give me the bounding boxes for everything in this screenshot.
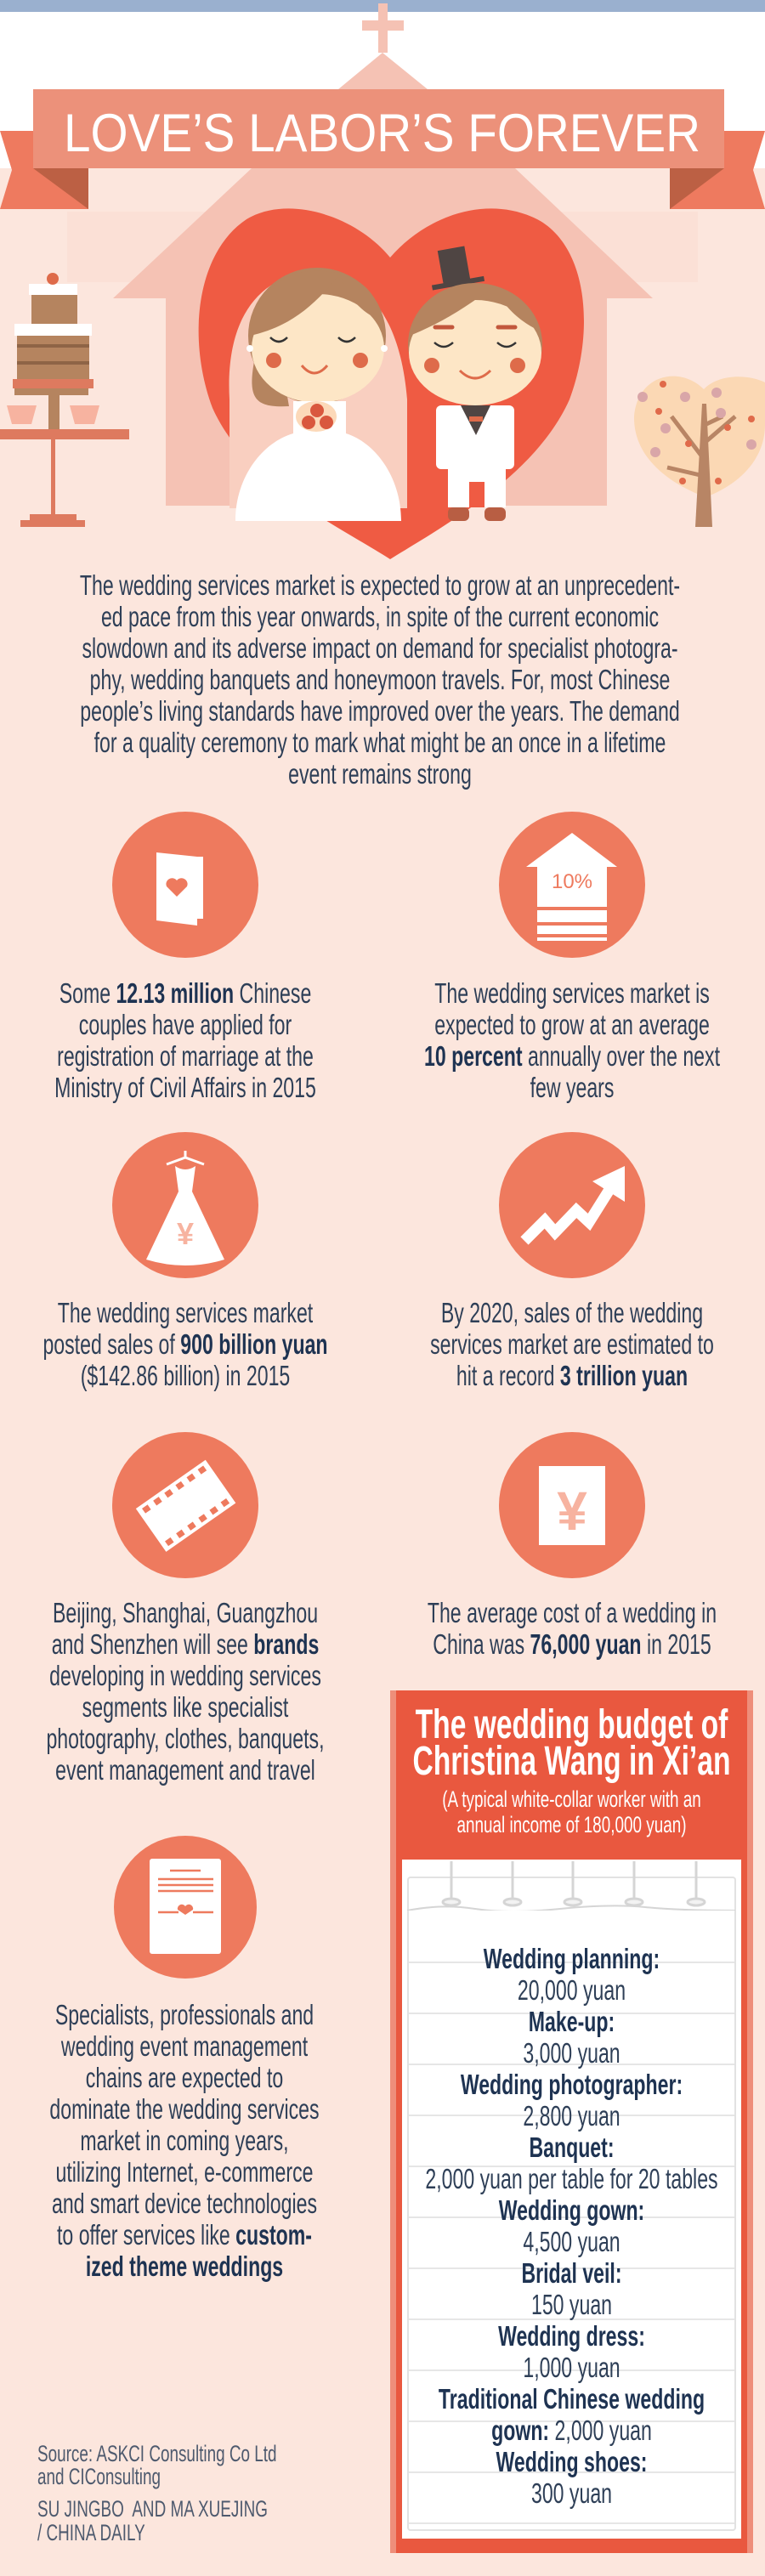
source credits: Source: ASKCI Consulting Co Ltd: [37, 2441, 277, 2466]
text: average cost: [428, 1597, 717, 1660]
source credits: and CIConsulting: [37, 2464, 161, 2489]
text: specialists: and smart device technologies: [52, 2188, 317, 2219]
veil: [230, 272, 407, 508]
text: 3 trillion: services market are estimated to: [430, 1328, 714, 1360]
panel: wedding budget: [390, 1690, 753, 2553]
budget subtitle: (A typical white-collar worker with an: [442, 1786, 701, 1812]
text: brands: developing in wedding services: [49, 1660, 321, 1691]
text: 3 trillion: [430, 1297, 714, 1391]
budget items: [425, 1943, 718, 2509]
budget items: 2,800 yuan: [523, 2100, 620, 2132]
icon: card: [112, 812, 258, 958]
icon: yen envelope: [499, 1432, 645, 1578]
banner ribbon: [0, 89, 765, 209]
text: couples: Some 12.13 million Chinese: [60, 977, 311, 1009]
text: specialists: chains are expected to: [86, 2062, 283, 2093]
groom: [408, 246, 542, 521]
text: 900 billion: ($142.86 billion) in 2015: [81, 1360, 290, 1391]
text: couples: registration of marriage at the: [57, 1040, 314, 1072]
budget items: Bridal veil:: [521, 2257, 622, 2289]
intro text: phy, wedding banquets and honeymoon travels. For, most Chinese: [90, 664, 670, 695]
icon: dress: [112, 1132, 258, 1278]
text: 900 billion: posted sales of 900 billion yuan: [42, 1328, 328, 1360]
intro text: event remains strong: [288, 758, 472, 790]
text: specialists: to offer services like custom-: [57, 2219, 312, 2250]
icon: rising zigzag: [499, 1132, 645, 1278]
budget title: Christina Wang in Xi’an: [413, 1739, 730, 1784]
text: 3 trillion: By 2020, sales of the wedding: [441, 1297, 703, 1328]
budget title: [413, 1702, 730, 1784]
budget items: 20,000 yuan: [518, 1974, 626, 2006]
budget items: 4,500 yuan: [523, 2226, 620, 2257]
text: specialists: dominate the wedding services: [49, 2093, 320, 2125]
text: couples: couples have applied for: [79, 1009, 292, 1040]
budget items: Banquet:: [529, 2132, 615, 2163]
budget items: Traditional Chinese wedding: [439, 2383, 705, 2415]
text: brands: Beijing, Shanghai, Guangzhou: [53, 1597, 318, 1628]
binder rings: [406, 1861, 735, 1911]
text: brands: segments like specialist: [82, 1691, 288, 1723]
budget items: gown: 2,000 yuan: [491, 2415, 652, 2446]
byline: / CHINA DAILY: [37, 2520, 145, 2545]
text: brands: [46, 1597, 325, 1786]
text: couples: [54, 977, 316, 1103]
budget items: 2,000 yuan per table for 20 tables: [425, 2163, 718, 2194]
heart: [199, 208, 584, 559]
icon: growth arrow 10%: 10%: [552, 870, 592, 893]
text: specialists: [49, 1999, 320, 2282]
budget items: 150 yuan: [531, 2289, 612, 2320]
intro text: [80, 569, 680, 790]
budget items: 1,000 yuan: [523, 2352, 620, 2383]
intro text: The wedding services market is expected to grow at an unprecedent-: [80, 569, 680, 601]
notepad: [402, 1860, 741, 2539]
text: specialists: ized theme weddings: [86, 2250, 283, 2282]
text: 10 percent: [424, 977, 720, 1103]
cake table: [0, 273, 129, 527]
intro text: ed pace from this year onwards, in spite of the current economic: [101, 601, 659, 632]
text: 900 billion: [42, 1297, 328, 1391]
text: brands: event management and travel: [55, 1754, 315, 1786]
header illustration: [0, 0, 765, 559]
text: brands: and Shenzhen will see brands: [52, 1628, 319, 1660]
title: LOVE’S LABOR’S FOREVER: [64, 104, 700, 163]
budget items: Wedding gown:: [499, 2194, 644, 2226]
text: 10 percent: The wedding services market is: [434, 977, 710, 1009]
budget subtitle: annual income of 180,000 yuan): [456, 1812, 687, 1837]
text: 900 billion: The wedding services market: [58, 1297, 313, 1328]
text: couples: Ministry of Civil Affairs in 2015: [54, 1072, 316, 1103]
intro text: people’s living standards have improved over the years. The demand: [80, 695, 680, 727]
intro text: for a quality ceremony to mark what might be an once in a lifetime: [94, 727, 666, 758]
tree: [634, 376, 765, 527]
budget items: 300 yuan: [531, 2477, 612, 2509]
budget items: Wedding planning:: [484, 1943, 660, 1974]
budget items: Make-up:: [529, 2006, 615, 2037]
source credits: [37, 2441, 277, 2489]
budget title: The wedding budget of: [416, 1702, 728, 1747]
church: [113, 3, 653, 506]
icon: dress: ¥: [177, 1216, 194, 1251]
budget items: Wedding dress:: [498, 2320, 645, 2352]
text: 10 percent: expected to grow at an average: [434, 1009, 710, 1040]
icon: document: [114, 1836, 257, 1979]
budget items: Wedding photographer:: [461, 2069, 683, 2100]
text: 10 percent: few years: [530, 1072, 614, 1103]
text: average cost: The average cost of a wedding in: [428, 1597, 717, 1628]
budget subtitle: [442, 1786, 701, 1837]
budget items: 3,000 yuan: [523, 2037, 620, 2069]
text: average cost: China was 76,000 yuan in 2015: [433, 1628, 711, 1660]
icon: growth arrow 10%: [499, 812, 645, 958]
text: specialists: wedding event management: [61, 2030, 308, 2062]
text: specialists: market in coming years,: [80, 2125, 289, 2156]
icon: yen envelope: ¥: [557, 1480, 587, 1542]
byline: SU JINGBO AND MA XUEJING: [37, 2496, 268, 2522]
text: specialists: utilizing Internet, e-commerce: [56, 2156, 313, 2188]
text: specialists: Specialists, professionals and: [55, 1999, 314, 2030]
intro text: slowdown and its adverse impact on demand for specialist photogra-: [82, 632, 678, 664]
text: 10 percent: 10 percent annually over the next: [424, 1040, 720, 1072]
budget items: Wedding shoes:: [496, 2446, 647, 2477]
byline: [37, 2496, 268, 2545]
text: 3 trillion: hit a record 3 trillion yuan: [456, 1360, 688, 1391]
icon: film strip: [112, 1432, 258, 1578]
bride: [235, 268, 401, 521]
text: brands: photography, clothes, banquets,: [46, 1723, 325, 1754]
